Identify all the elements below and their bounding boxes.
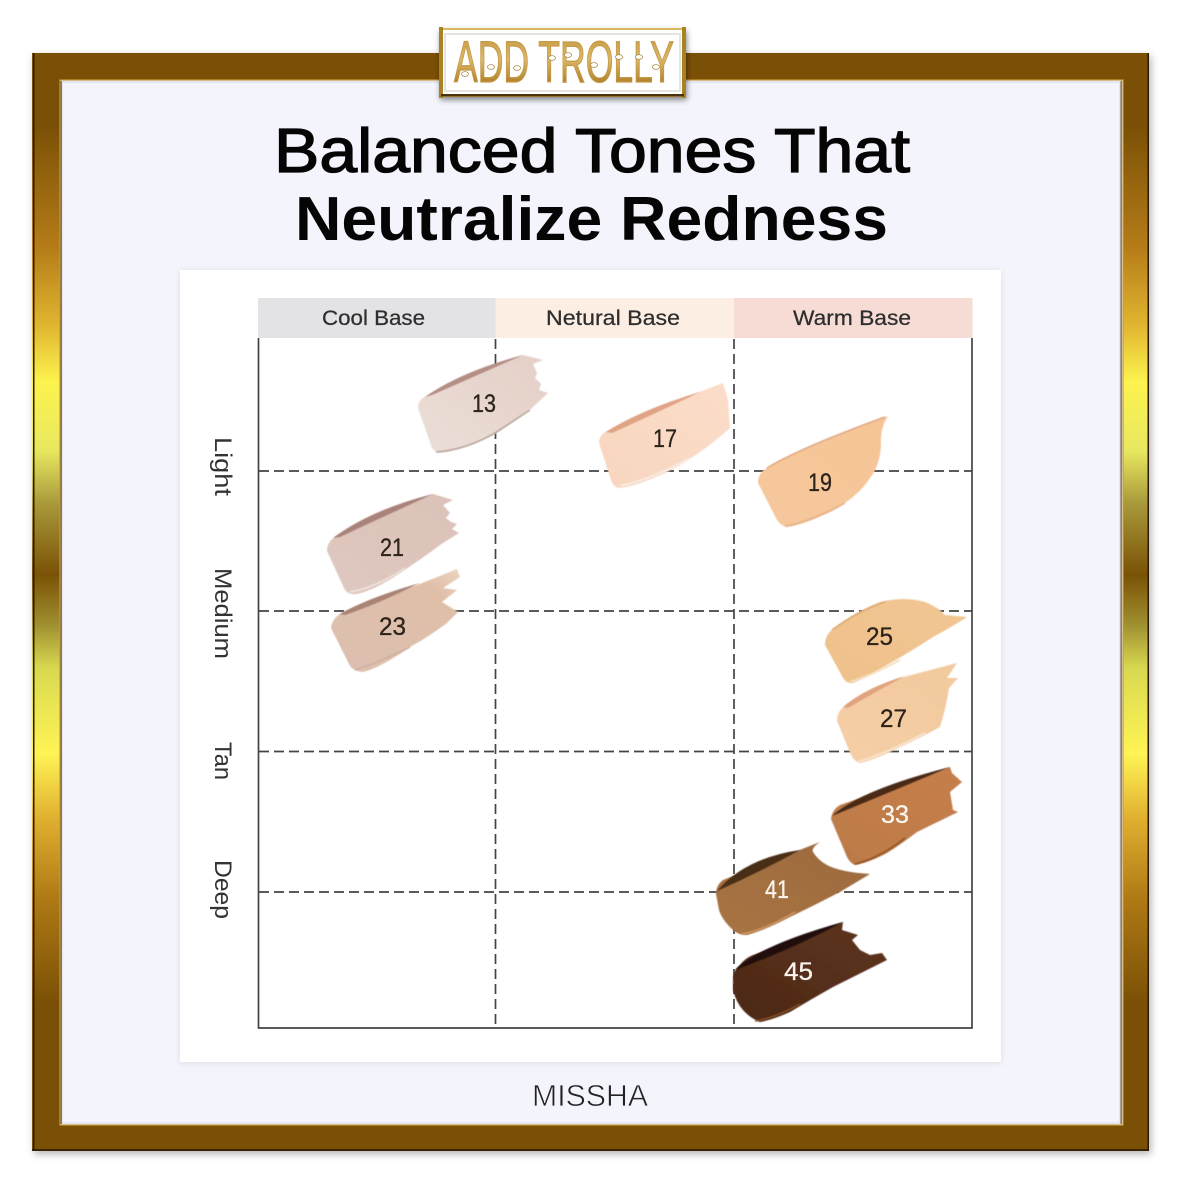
panel: tone chart: [180, 270, 1001, 1062]
swatch 41: [716, 842, 870, 935]
chart grid: [258, 338, 972, 1028]
swatch 21: 21: [380, 534, 404, 562]
brand name: MISSHA: MISSHA: [532, 1078, 648, 1113]
row label: Light: Light: [209, 437, 236, 496]
swatch 23: 23: [379, 613, 406, 641]
swatch 33: [831, 767, 962, 865]
column header: Cool Base: Cool Base: [322, 307, 425, 330]
swatch 13: [418, 355, 548, 453]
logo badge: [439, 27, 686, 98]
swatch 19: [758, 416, 888, 527]
swatch 27: [837, 663, 958, 763]
swatch 33: 33: [881, 801, 909, 829]
swatch 41: 41: [765, 876, 789, 904]
swatch 13: 13: [472, 390, 496, 418]
swatch 21: [327, 494, 459, 594]
row label: Deep: Deep: [209, 860, 236, 919]
swatch 23: [331, 569, 460, 672]
swatch 45: [733, 922, 887, 1022]
swatch 45: 45: [784, 958, 813, 986]
swatch 17: [599, 383, 730, 488]
swatch 25: [825, 599, 967, 683]
title: Neutralize Redness: [295, 185, 888, 254]
logo leaves: [462, 53, 660, 76]
swatch 27: 27: [880, 705, 907, 733]
column header: Netural Base: [496, 298, 734, 338]
swatch 17: 17: [653, 425, 677, 453]
row label: Tan: Tan: [209, 742, 236, 780]
logo wordmark: ADD TROLLY: [454, 30, 674, 95]
row label: Medium: Medium: [209, 568, 236, 659]
column header: Warm Base: Warm Base: [793, 307, 911, 330]
column header: Cool Base: [258, 298, 496, 338]
title: Balanced Tones That: [274, 117, 910, 186]
column header: Warm Base: [734, 298, 972, 338]
swatch 19: 19: [808, 469, 832, 497]
column header: Netural Base: Netural Base: [546, 307, 680, 330]
title: [274, 117, 910, 254]
swatch 25: 25: [866, 623, 893, 651]
